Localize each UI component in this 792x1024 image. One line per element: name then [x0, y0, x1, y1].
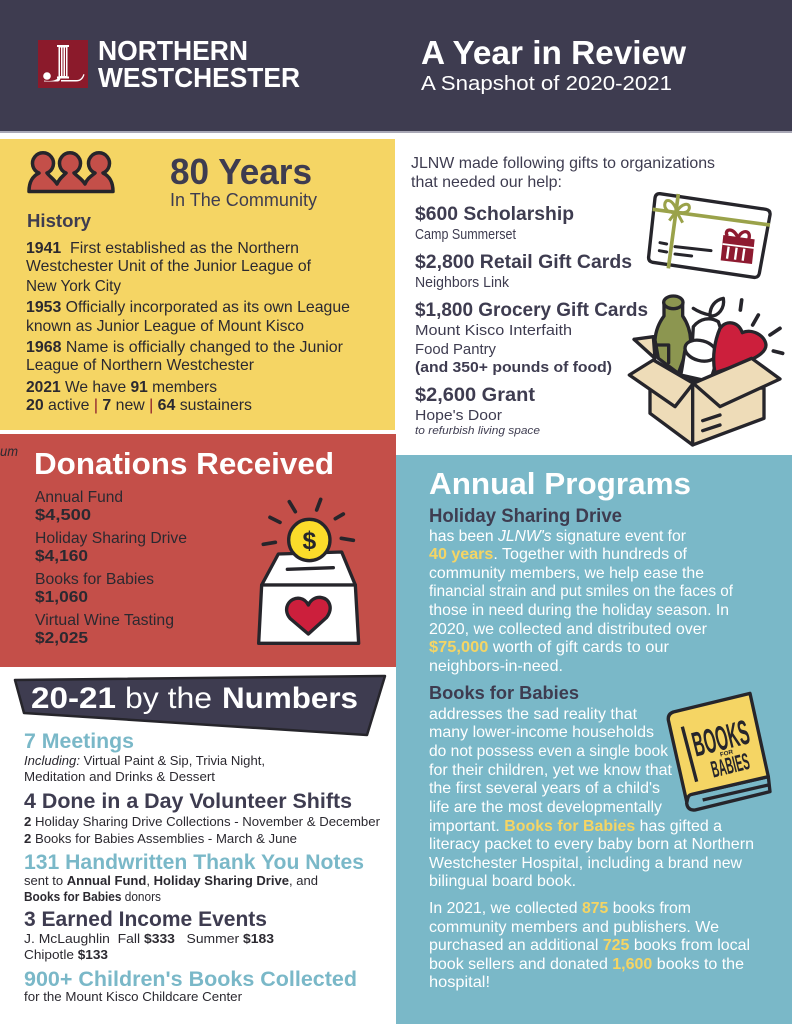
icon: ballot box with coin: [259, 499, 359, 643]
header band: [0, 0, 792, 133]
icon: donation box of food: [629, 296, 783, 445]
donation: holiday sharing drive: $4,160: [35, 548, 88, 565]
stat: thank you notes: sent to Annual Fund, Holiday Sharing Drive, and: [24, 873, 318, 888]
gifts intro: that needed our help:: [411, 174, 562, 191]
logo wordmark: WESTCHESTER: [98, 62, 300, 93]
title: A Snapshot of 2020-2021: [421, 73, 672, 95]
books for babies text: [429, 706, 754, 890]
holiday sharing drive text: community members, we help ease the: [429, 565, 704, 582]
history timeline: League of Northern Westchester: [26, 357, 255, 374]
stat: earned income: 3 Earned Income Events: [24, 908, 267, 931]
donation: annual fund: Annual Fund: [35, 489, 123, 506]
stat: books collected: [24, 968, 357, 1004]
donation: annual fund: $4,500: [35, 507, 91, 524]
stat: thank you notes: [24, 851, 364, 904]
books collected text: book sellers and donated 1,600 books to the: [429, 956, 744, 973]
stat: books collected: for the Mount Kisco Childcare Center: [24, 989, 243, 1004]
holiday sharing drive text: neighbors-in-need.: [429, 658, 563, 675]
title: [421, 34, 686, 95]
books for babies text: the first several years of a child's: [429, 780, 660, 797]
banner: 20-21 by the numbers: Numbers: [222, 682, 358, 715]
gift: grant: Hope's Door: [415, 407, 502, 424]
panel: history: [0, 139, 395, 430]
history timeline: 1953 Officially incorporated as its own League: [26, 299, 350, 316]
donation: holiday sharing drive: Holiday Sharing Drive: [35, 530, 187, 547]
donation: annual fund: [35, 489, 123, 524]
80 years heading: In The Community: [170, 190, 317, 210]
donation: holiday sharing drive: [35, 530, 187, 565]
clipped overflow text: um: [0, 443, 18, 459]
donation: virtual wine tasting: $2,025: [35, 630, 88, 647]
holiday sharing drive text: 2020, we collected and distributed over: [429, 621, 708, 638]
panel: gifts to organizations: [411, 155, 783, 445]
holiday sharing drive text: $75,000 worth of gift cards to our: [429, 639, 670, 656]
holiday sharing drive text: has been JLNW's signature event for: [429, 528, 687, 545]
panel: donations received: [0, 434, 396, 667]
gift: retail cards: [415, 252, 632, 291]
panel: annual programs: [396, 455, 792, 1024]
stat: volunteer shifts: [24, 790, 381, 846]
gift: grant: to refurbish living space: [415, 425, 540, 437]
panel: numbers list: [24, 730, 381, 1004]
gift: grocery cards: [415, 300, 648, 376]
books for babies text: do not possess even a single book: [429, 743, 669, 760]
history timeline: 1968 Name is officially changed to the Junior: [26, 339, 344, 356]
gift: retail cards: $2,800 Retail Gift Cards: [415, 252, 632, 273]
stat: earned income: Chipotle $133: [24, 947, 108, 962]
gift: grocery cards: Food Pantry: [415, 341, 496, 358]
gift: grocery cards: $1,800 Grocery Gift Cards: [415, 300, 648, 321]
donation: books for babies: Books for Babies: [35, 571, 154, 588]
stat: earned income: [24, 908, 274, 962]
books for babies heading: Books for Babies: [429, 683, 579, 703]
gifts intro: JLNW made following gifts to organizations: [411, 155, 715, 172]
holiday sharing drive text: 40 years. Together with hundreds of: [429, 546, 688, 563]
stat: meetings: Including: Virtual Paint & Sip, Trivia Night,: [24, 753, 265, 768]
history timeline: 2021 We have 91 members: [26, 379, 217, 396]
donations heading: Donations Received: [34, 446, 334, 481]
stat: thank you notes: 131 Handwritten Thank You Notes: [24, 851, 364, 874]
history timeline: Westchester Unit of the Junior League of: [26, 258, 312, 275]
history timeline: 20 active | 7 new | 64 sustainers: [26, 397, 252, 414]
logo wordmark: [98, 35, 300, 93]
donation: books for babies: [35, 571, 154, 606]
stat: meetings: 7 Meetings: [24, 730, 134, 753]
history timeline: 1941 First established as the Northern: [26, 240, 299, 257]
stat: meetings: Meditation and Drinks & Dessert: [24, 769, 215, 784]
stat: volunteer shifts: 2 Books for Babies Assemblies - March & June: [24, 831, 297, 846]
icon: books for babies book: FOR: [720, 749, 735, 759]
books for babies text: life are the most developmentally: [429, 799, 662, 816]
donation: virtual wine tasting: [35, 612, 174, 647]
gift: grocery cards: (and 350+ pounds of food): [415, 359, 612, 376]
books for babies text: addresses the sad reality that: [429, 706, 638, 723]
stat: volunteer shifts: 2 Holiday Sharing Drive Collections - November & December: [24, 814, 381, 829]
donation: books for babies: $1,060: [35, 589, 88, 606]
banner: 20-21 by the numbers: 20-21: [31, 682, 116, 715]
gift: grant: $2,600 Grant: [415, 385, 536, 406]
gift: scholarship: $600 Scholarship: [415, 204, 574, 225]
holiday sharing drive heading: Holiday Sharing Drive: [429, 506, 622, 527]
books for babies text: many lower-income households: [429, 724, 654, 741]
gift: retail cards: Neighbors Link: [415, 274, 509, 291]
stat: thank you notes: Books for Babies donors: [24, 889, 161, 904]
books collected text: community members and publishers. We: [429, 919, 719, 936]
history timeline: [26, 240, 350, 414]
banner: 20-21 by the numbers: [15, 676, 385, 735]
books for babies text: bilingual board book.: [429, 873, 576, 890]
books for babies text: important. Books for Babies has gifted a: [429, 818, 722, 835]
history timeline: known as Junior League of Mount Kisco: [26, 318, 304, 335]
donation: virtual wine tasting: Virtual Wine Tasting: [35, 612, 174, 629]
stat: meetings: [24, 730, 265, 784]
icon: gift card: [649, 194, 770, 277]
holiday sharing drive text: [429, 528, 734, 675]
holiday sharing drive text: those in need during the holiday season. In: [429, 602, 729, 619]
gift: grocery cards: Mount Kisco Interfaith: [415, 322, 572, 339]
books for babies text: Westchester Hospital, including a brand new: [429, 855, 742, 872]
gifts intro: [411, 155, 715, 191]
books collected text: [429, 900, 750, 991]
books for babies text: for their children, yet we know that: [429, 762, 673, 779]
books collected text: hospital!: [429, 974, 490, 991]
icon: ballot box with coin: $: [302, 528, 316, 555]
logo mark: [38, 40, 88, 88]
stat: books collected: 900+ Children's Books Collected: [24, 968, 357, 991]
books for babies text: literacy packet to every baby born at Northern: [429, 836, 754, 853]
gift: scholarship: [415, 204, 574, 243]
80 years heading: [170, 151, 317, 210]
gift: scholarship: Camp Summerset: [415, 226, 517, 243]
stat: volunteer shifts: 4 Done in a Day Volunteer Shifts: [24, 790, 352, 813]
icon: three people: [29, 153, 113, 192]
banner: 20-21 by the numbers: by the: [125, 682, 212, 715]
history timeline: New York City: [26, 278, 121, 295]
stat: earned income: J. McLaughlin Fall $333 Summer $183: [24, 931, 274, 946]
books collected text: purchased an additional 725 books from local: [429, 937, 750, 954]
annual programs heading: Annual Programs: [429, 466, 691, 501]
logo wordmark: NORTHERN: [98, 35, 248, 66]
books collected text: In 2021, we collected 875 books from: [429, 900, 691, 917]
icon: books for babies book: [668, 693, 770, 810]
80 years heading: 80 Years: [170, 151, 312, 192]
holiday sharing drive text: financial strain and put smiles on the faces of: [429, 583, 734, 600]
gift: grant: [415, 385, 540, 437]
title: A Year in Review: [421, 34, 686, 71]
history heading: History: [27, 211, 91, 231]
